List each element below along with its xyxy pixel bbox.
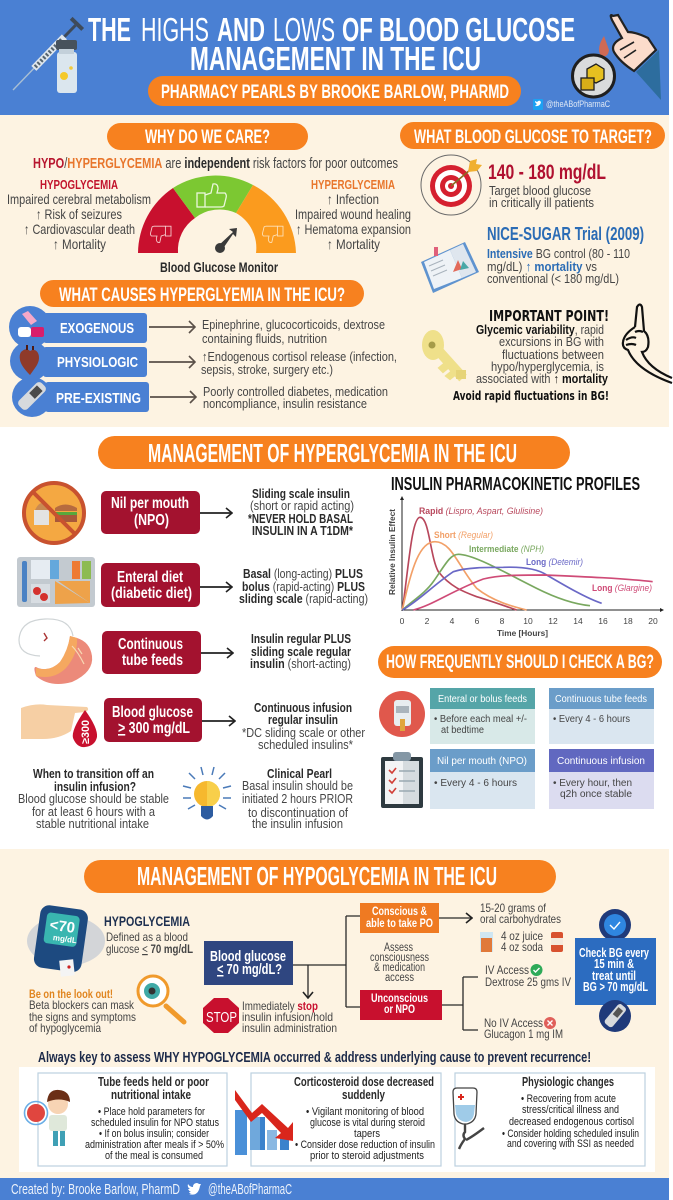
oral carbohydrates: oral carbohydrates [480,912,561,926]
icon: target [421,155,482,215]
card: continuous infusion: • Every hour, then [553,778,632,789]
arrow [200,512,232,514]
NPO regimen: (short or rapid acting) [250,499,354,513]
gauge label: Blood Glucose Monitor [160,259,278,275]
text: suddenly [342,1087,386,1102]
arrow [200,586,232,588]
line chart: 6 [475,616,480,626]
icon: key [422,330,466,379]
card: continuous infusion [549,749,654,809]
important point: IMPORTANT POINT! [489,307,609,325]
card: enteral or bolus feeds: Enteral or bolus feeds [438,694,527,705]
icon: stop sign [203,998,239,1033]
pre-existing causes [203,384,388,411]
box: NPO: Nil per mouth [111,495,189,512]
panel: hyperglycemia management [17,483,368,831]
target description: in critically ill patients [489,195,594,210]
assess note: Assess [384,942,413,954]
high glucose regimen: *DC sliding scale or other [242,726,365,740]
oral carbohydrates: 15-20 grams of [480,901,547,915]
footer [0,1178,669,1200]
line chart: 14 [573,616,583,626]
box: conscious: Conscious & [372,904,427,918]
icon: glucometer: <70 [49,917,76,937]
assess note [370,942,429,984]
card: enteral or bolus feeds: • Before each meal +/- [434,714,527,725]
title: HIGHS [141,11,209,48]
hypoglycemia list: Impaired cerebral metabolism [7,191,151,207]
hyperglycemia list: ↑ Hematoma expansion [296,221,411,237]
footer: Created by: Brooke Barlow, PharmD [11,1181,180,1198]
clinical pearl: Clinical Pearl [267,767,332,781]
card: continuous infusion: q2h once stable [560,789,632,800]
panel: why do we care [7,123,411,275]
target description: Target blood glucose [489,183,591,198]
NICE-SUGAR trial: conventional (< 180 mg/dL) [487,271,619,286]
card: nil per mouth: • Every 4 - 6 hours [434,778,517,789]
text: Tube feeds held or poor [98,1074,209,1089]
icon: stop sign: STOP [206,1009,237,1026]
text: glucose is vital during steroid [310,1117,425,1129]
text: Physiologic changes [522,1074,614,1089]
box: blood glucose over 300 [104,698,202,742]
physiologic causes [201,349,397,377]
important point: fluctuations between [502,348,604,362]
exogenous causes: containing fluids, nutrition [202,331,327,346]
important point: Glycemic variability, rapid [476,323,604,337]
box: enteral diet [101,563,200,607]
icon: glucose meter [379,691,425,737]
icon: sugar cubes on plate [572,55,614,97]
box: recheck instructions: BG > 70 mg/dL [583,980,648,994]
beta blocker warning: of hypoglycemia [29,1021,101,1035]
text: stress/critical illness and [522,1104,619,1116]
line chart: Time [Hours] [497,629,548,638]
heading: causes: WHAT CAUSES HYPERGLYEMIA IN THE ICU? [59,285,345,306]
panel: header banner [0,0,669,115]
panel: causes of hyperglycemia [9,280,397,417]
text: and covering with SSI as needed [507,1138,634,1150]
box: unconscious: or NPO [384,1002,415,1016]
important point: Avoid rapid fluctuations in BG! [453,388,609,403]
heading: why do we care [107,123,308,150]
box: blood glucose over 300: Blood glucose [112,704,193,721]
important point: hypo/hyperglycemia, is [491,360,604,374]
physiologic causes: ↑Endogenous cortisol release (infection, [202,349,397,364]
panel: hypoglycemia management [27,901,656,1041]
title [88,11,575,77]
enteral regimen: Basal (long-acting) PLUS [243,567,363,581]
card: tube feeds held [24,1073,227,1166]
transition off infusion note: Blood glucose should be stable [18,792,169,806]
icon: sick boy [24,1090,70,1146]
panel: blood glucose target [400,122,672,403]
text: decreased endogenous cortisol [509,1116,634,1128]
heading: management of hypoglycemia [84,860,556,893]
title: LOWS [273,11,335,48]
panel: BG check frequency [378,646,662,809]
card: enteral or bolus feeds [430,688,535,744]
high glucose regimen: scheduled insulins* [258,738,353,752]
line chart: Short (Regular) [434,530,493,540]
line chart: Long (Detemir) [526,557,583,567]
icon: IV bag [453,1088,484,1149]
important point: excursions in BG with [499,335,604,349]
card: continuous tube feeds [549,688,654,744]
beta blocker warning: Beta blockers can mask [29,998,135,1012]
stop insulin instruction: insulin infusion/hold [242,1010,333,1024]
text: nutritional intake [111,1087,191,1102]
text: administration after meals if > 50% [85,1139,224,1151]
physiologic causes: sepsis, stroke, surgery etc.) [201,362,333,377]
box: enteral diet: (diabetic diet) [111,585,192,602]
transition off infusion note: insulin infusion? [54,780,136,794]
pre-existing causes: Poorly controlled diabetes, medication [203,384,388,399]
box: continuous tube feeds: Continuous [118,636,183,653]
IV access [485,963,571,989]
box: continuous tube feeds: tube feeds [122,652,183,669]
card: nil per mouth: Nil per mouth (NPO) [437,755,527,767]
icon: hand with blood drop [599,15,661,100]
line chart: 8 [500,616,505,626]
icon: falling bar chart [235,1090,293,1155]
line chart: Rapid (Lispro, Aspart, Glulisine) [419,506,543,516]
box: recheck instructions [575,938,656,1005]
subtitle pill [148,76,521,106]
oral carbohydrates [480,901,563,954]
enteral regimen: bolus (rapid-acting) PLUS [242,580,365,594]
text: Corticosteroid dose decreased [294,1074,434,1089]
no IV access: No IV Access [484,1016,543,1030]
line chart: 12 [548,616,558,626]
box: blood glucose over 300: > 300 mg/dL [118,720,190,737]
transition off infusion note: When to transition off an [33,767,154,781]
box: recheck instructions: Check BG every [579,946,649,960]
card: continuous tube feeds: • Every 4 - 6 hours [553,714,630,725]
icon: meal tray [17,557,95,607]
card: continuous infusion: Continuous infusion [557,755,645,767]
box: conscious [360,903,439,933]
gauge: blood glucose monitor [138,176,296,253]
beta blocker warning: Be on the look out! [29,987,113,1001]
IV access: IV Access [485,963,529,977]
NPO regimen [248,487,354,538]
text: • Vigilant monitoring of blood [306,1106,424,1118]
line chart: 20 [648,616,658,626]
text: of the meal is consumed [105,1150,203,1162]
transition off infusion note [18,767,169,831]
clinical pearl: Basal insulin should be [242,779,353,793]
icon: finger with blood drop: ≥300 [80,720,92,744]
hypoglycemia list: ↑ Cardiovascular death [24,221,135,237]
tube feed regimen: sliding scale regular [251,645,351,659]
text: • Consider dose reduction of insulin [295,1139,435,1151]
heading: check frequency [378,646,662,678]
no IV access [484,1016,563,1041]
text: prior to steroid adjustments [310,1150,424,1162]
twitter handle: @theABofPharmaC [546,99,610,109]
transition off infusion note: stable nutritional intake [36,817,149,831]
card: nil per mouth [430,749,535,809]
beta blocker warning [29,987,136,1035]
line chart: Intermediate (NPH) [469,544,544,554]
target value: 140 - 180 mg/dL [488,161,606,184]
text: • Place hold parameters for [98,1106,205,1118]
assess note: consciousness [370,952,429,964]
icon: check badge [599,909,631,941]
title: AND [217,11,265,48]
icon: glucometer: mg/dL [52,933,77,945]
high glucose regimen: Continuous infusion [254,701,352,715]
pre-existing causes: noncompliance, insulin resistance [203,396,367,411]
icon: glucometer [27,904,105,977]
important point: associated with ↑ mortality [476,372,608,386]
panel: causes of hypoglycemia [19,1067,655,1172]
subtitle pill: PHARMACY PEARLS BY BROOKE BARLOW, PHARMD [161,82,509,103]
NICE-SUGAR trial: mg/dL) ↑ mortality vs [487,259,597,274]
text [85,1074,224,1162]
high glucose regimen: regular insulin [268,713,338,727]
no IV access: Glucagon 1 mg IM [484,1027,563,1041]
exogenous causes [202,317,385,346]
icon: no food [24,483,84,543]
box: blood glucose question [204,941,293,985]
text [502,1074,639,1150]
tube feed regimen: insulin (short-acting) [250,657,351,671]
hyperglycemia list: ↑ Mortality [327,236,380,252]
row: physiologic [10,341,147,381]
line chart: 16 [598,616,608,626]
icon: book [421,242,479,293]
IV access: Dextrose 25 gms IV [485,975,571,989]
box: unconscious: Unconscious [371,991,428,1005]
line chart: 4 [450,616,455,626]
card: continuous tube feeds: Continuous tube feeds [555,694,647,705]
line chart [388,496,664,638]
stop insulin instruction [242,999,337,1035]
box: enteral diet: Enteral diet [117,569,184,586]
target description [489,183,594,210]
title: THE [88,11,131,48]
tube feed regimen: Insulin regular PLUS [251,632,351,646]
heading: why do we care: WHY DO WE CARE? [145,127,270,148]
assess note: & medication [374,962,425,974]
arrow [149,326,195,328]
box: blood glucose question: < 70 mg/dL? [217,961,282,978]
enteral regimen [239,567,368,606]
text: • Recovering from acute [521,1093,616,1105]
oral carbohydrates: 4 oz soda [501,940,543,954]
oral carbohydrates: 4 oz juice [501,929,543,943]
hyperglycemia list: ↑ Infection [327,191,379,207]
exogenous causes: Epinephrine, glucocorticoids, dextrose [202,317,385,332]
stop insulin instruction: Immediately stop [242,999,318,1013]
heading: causes [40,280,364,307]
row: pre-existing: PRE-EXISTING [56,390,141,407]
twitter handle [533,99,610,110]
hypoglycemia definition: Defined as a blood [106,930,188,944]
NPO regimen: *NEVER HOLD BASAL [248,512,353,526]
icon: glucose meter badge [599,1000,631,1032]
risk factors statement: HYPO/HYPERGLYCEMIA are independent risk factors for poor outcomes [33,155,398,172]
footer: @theABofPharmaC [208,1181,292,1198]
clinical pearl [242,767,353,831]
text: tapers [354,1128,380,1140]
box: continuous tube feeds [102,631,201,674]
hypoglycemia definition: glucose < 70 mg/dL [106,942,193,956]
transition off infusion note: for at least 6 hours with a [32,805,155,819]
arrow [149,361,195,363]
hypoglycemia list: ↑ Risk of seizures [36,206,122,222]
title: MANAGEMENT IN THE ICU [190,40,481,77]
icon: vial [56,40,77,93]
clinical pearl: to discontinuation of [248,806,348,820]
hypoglycemia list [7,177,151,252]
card: enteral or bolus feeds: at bedtime [441,725,484,736]
hypoglycemia list: HYPOGLYCEMIA [40,177,118,192]
text: scheduled insulin for NPO status [91,1117,219,1129]
tube feed regimen [250,632,351,671]
row: exogenous: EXOGENOUS [60,320,134,337]
line chart: 10 [523,616,533,626]
box: recheck instructions: 15 min & [594,957,634,971]
hypoglycemia definition [104,913,193,956]
hypoglycemia definition: HYPOGLYCEMIA [104,913,190,929]
arrow [201,652,233,654]
box: recheck instructions: treat until [592,969,636,983]
hyperglycemia list: HYPERGLYCEMIA [311,177,395,192]
text [294,1074,435,1162]
icon: stomach with feeding tube [19,619,92,684]
card: corticosteroid decreased [235,1073,441,1166]
NPO regimen: Sliding scale insulin [252,487,350,501]
box: conscious: able to take PO [366,916,433,930]
row: exogenous [9,306,147,348]
arrow [150,396,196,398]
high glucose regimen [242,701,365,752]
icon: clipboard [381,752,423,808]
icon: pointing finger [623,304,672,383]
stop insulin instruction: insulin administration [242,1021,337,1035]
line chart: 18 [623,616,633,626]
line chart: Relative Insulin Effect [388,509,397,595]
assess note: access [385,972,414,984]
card: physiologic changes [453,1073,645,1166]
clinical pearl: the insulin infusion [252,817,343,831]
icon: light bulb [183,767,231,820]
line chart: Long (Glargine) [592,583,652,593]
icon: syringe [7,17,84,96]
beta blocker warning: the signs and symptoms [29,1010,136,1024]
box: unconscious [360,990,442,1020]
NICE-SUGAR trial [487,224,644,286]
box: blood glucose question: Blood glucose [210,948,286,965]
arrow [202,720,235,722]
flow lines [293,916,478,1030]
box: NPO [101,491,200,534]
box: NPO: (NPO) [134,512,169,529]
line chart: 0 [400,616,405,626]
hyperglycemia list [295,177,411,252]
row: pre-existing [12,377,149,417]
panel: insulin pharmacokinetic profiles [388,474,664,638]
important point [453,307,609,403]
text: • If on bolus insulin; consider [99,1128,209,1140]
NICE-SUGAR trial: Intensive BG control (80 - 110 [487,246,630,261]
heading: management of hyperglycemia [98,436,570,469]
hypoglycemia list: ↑ Mortality [53,236,106,252]
hyperglycemia list: Impaired wound healing [295,206,411,222]
line chart: 2 [425,616,430,626]
icon: finger with blood drop [21,704,97,747]
NPO regimen: INSULIN IN A T1DM* [252,524,353,538]
enteral regimen: sliding scale (rapid-acting) [239,592,368,606]
row: physiologic: PHYSIOLOGIC [57,354,138,371]
clinical pearl: initiated 2 hours PRIOR [242,792,353,806]
icon: magnifying glass with eye [138,976,184,1022]
